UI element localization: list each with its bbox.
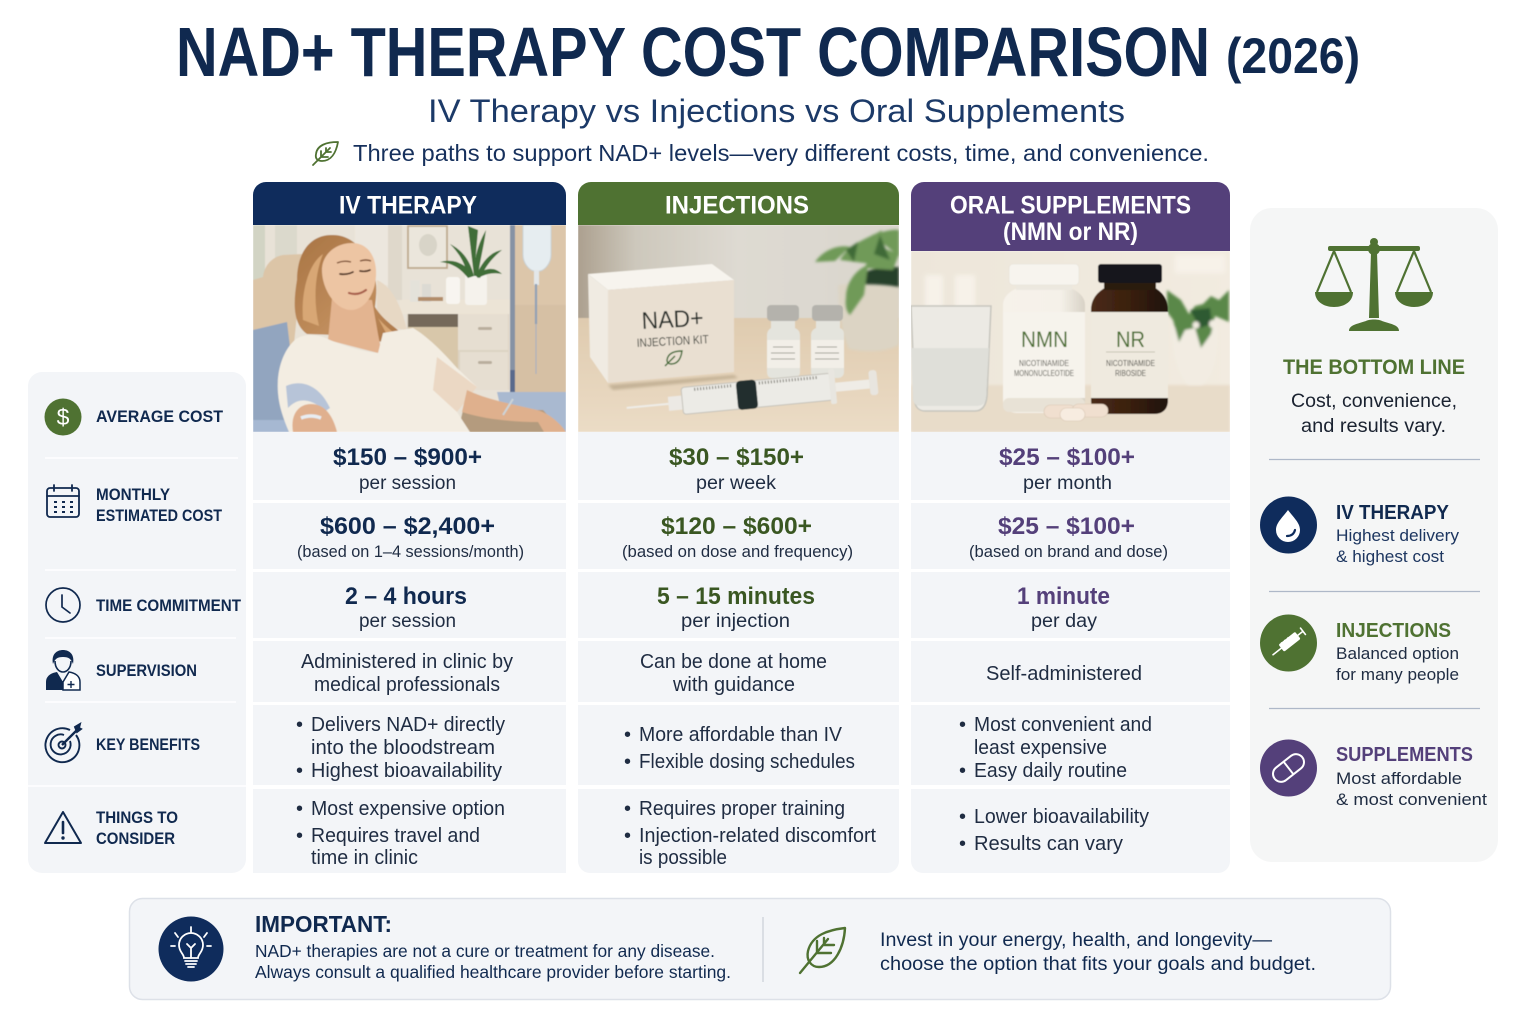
icon: calendar — [47, 485, 79, 517]
icon: syringe — [1260, 614, 1317, 672]
icon: dollar coin — [44, 398, 82, 436]
row: time: 1 minute — [1017, 583, 1110, 610]
header: oral supplements: ORAL SUPPLEMENTS — [950, 192, 1191, 220]
row: supervision: Self-administered — [986, 663, 1142, 685]
text: summary: Cost, convenience, — [1291, 391, 1457, 412]
label: things to consider: CONSIDER — [96, 830, 175, 848]
label: monthly estimated cost: ESTIMATED COST — [96, 507, 222, 525]
row: considerations: Lower bioavailability — [974, 806, 1149, 828]
row: average cost: $30 – $150+ — [669, 444, 804, 471]
label: monthly estimated cost: MONTHLY — [96, 486, 170, 504]
row: time — [1017, 583, 1110, 632]
row: monthly cost: $120 – $600+ — [661, 513, 812, 540]
glass — [911, 306, 991, 411]
summary: injections: Balanced option — [1336, 644, 1459, 663]
text: disclaimer: Always consult a qualified healthcare provider before starting. — [255, 962, 731, 982]
title: (2026) — [1226, 28, 1360, 84]
NR bottle: RIBOSIDE — [1115, 369, 1146, 378]
NR bottle: NICOTINAMIDE — [1106, 359, 1155, 368]
row: benefits: least expensive — [974, 737, 1107, 759]
intro line with leaf icon: Three paths to support NAD+ levels—very different costs, time, and convenience. — [353, 140, 1209, 166]
header: IV therapy — [253, 182, 566, 225]
face — [322, 243, 376, 310]
summary: IV therapy: Highest delivery — [1336, 526, 1459, 545]
row: monthly cost: (based on dose and frequency) — [622, 542, 853, 561]
row: considerations: • — [959, 806, 966, 828]
row: monthly cost — [622, 513, 853, 561]
row: considerations: Most expensive option — [311, 798, 505, 820]
text: disclaimer: NAD+ therapies are not a cure or treatment for any disease. — [255, 941, 715, 961]
row: considerations — [624, 798, 876, 869]
text: important heading: IMPORTANT: — [255, 911, 392, 937]
icon: dollar coin: $ — [57, 404, 70, 430]
row: benefits: • — [624, 751, 631, 773]
row: supervision: with guidance — [672, 674, 795, 696]
vials — [767, 305, 800, 378]
icon: capsule — [1260, 740, 1317, 796]
label: things to consider — [96, 809, 178, 848]
summary: IV therapy: IV THERAPY — [1336, 502, 1450, 524]
text: closing message: choose the option that fits your goals and budget. — [880, 954, 1316, 975]
icon: target — [45, 724, 81, 762]
row: supervision: Can be done at home — [640, 651, 827, 673]
text: closing message: Invest in your energy, health, and longevity— — [880, 930, 1272, 951]
chair — [253, 254, 302, 346]
row: benefits: Most convenient and — [974, 714, 1152, 736]
syringe — [626, 370, 878, 415]
row: considerations: is possible — [639, 847, 727, 869]
summary: injections: INJECTIONS — [1336, 620, 1451, 642]
icon: doctor — [46, 650, 80, 690]
icon: balance scales — [1315, 238, 1433, 331]
NR bottle: NR — [1116, 327, 1145, 352]
heading: the bottom line: THE BOTTOM LINE — [1283, 356, 1465, 379]
row: benefits: into the bloodstream — [311, 737, 495, 759]
summary: injections: for many people — [1336, 665, 1459, 684]
text: closing message — [880, 930, 1316, 975]
row: time — [657, 583, 815, 632]
icon: warning triangle — [45, 812, 81, 843]
icon: clock — [46, 588, 80, 622]
panel: row labels — [28, 372, 246, 873]
row: average cost: $25 – $100+ — [999, 444, 1135, 471]
panel: oral supplements column — [911, 182, 1230, 873]
summary: supplements — [1336, 744, 1487, 809]
NMN bottle: NICOTINAMIDE — [1019, 359, 1069, 368]
panel: IV therapy column — [253, 182, 566, 873]
row: time: per day — [1031, 611, 1098, 632]
title: NAD+ THERAPY COST COMPARISON — [176, 13, 1210, 91]
summary: IV therapy: & highest cost — [1336, 547, 1444, 566]
row: supervision: medical professionals — [314, 674, 500, 696]
row: monthly cost: $600 – $2,400+ — [320, 513, 495, 540]
NMN bottle — [1003, 264, 1085, 413]
header: IV therapy: IV THERAPY — [339, 192, 477, 220]
row: monthly cost: (based on 1–4 sessions/month) — [297, 542, 524, 561]
row: considerations: Requires proper training — [639, 798, 845, 820]
summary: IV therapy — [1336, 502, 1459, 566]
header: injections: INJECTIONS — [665, 192, 809, 220]
neck — [328, 298, 382, 354]
row: benefits: • — [296, 760, 303, 782]
row: supervision — [301, 651, 513, 696]
row: monthly cost: $25 – $100+ — [998, 513, 1135, 540]
text: summary — [1291, 391, 1457, 437]
row: benefits: • — [959, 760, 966, 782]
row: considerations: • — [624, 798, 631, 820]
header: injections — [578, 182, 899, 225]
NR bottle — [1091, 264, 1168, 414]
row: monthly cost — [969, 513, 1168, 561]
row: considerations: • — [296, 798, 303, 820]
label: things to consider: THINGS TO — [96, 809, 178, 827]
row: average cost: per session — [359, 473, 456, 494]
subtitle: IV Therapy vs Injections vs Oral Supplements — [428, 93, 1125, 129]
row: average cost — [999, 444, 1135, 494]
row: benefits: Easy daily routine — [974, 760, 1127, 782]
summary: supplements: & most convenient — [1336, 790, 1487, 809]
row: considerations: • — [624, 825, 631, 847]
text: summary: and results vary. — [1301, 416, 1446, 437]
row: benefits: • — [296, 714, 303, 736]
photo: NAD+ injection kit, vials and syringe: NAD+ — [641, 305, 704, 335]
row: benefits — [296, 714, 505, 782]
panel: the bottom line — [1250, 208, 1498, 862]
summary: injections — [1336, 620, 1459, 684]
panel: injections column — [578, 182, 899, 873]
row: considerations: Requires travel and — [311, 825, 480, 847]
icon: light bulb — [158, 916, 224, 982]
label: key benefits: KEY BENEFITS — [96, 736, 200, 754]
row: supervision: Administered in clinic by — [301, 651, 513, 673]
row: considerations — [296, 798, 505, 869]
row: considerations: Injection-related discomfort — [639, 825, 876, 847]
row: average cost — [669, 444, 804, 494]
row: benefits: Highest bioavailability — [311, 760, 502, 782]
row: benefits: • — [959, 714, 966, 736]
row: benefits: • — [624, 724, 631, 746]
row: benefits: Flexible dosing schedules — [639, 751, 855, 773]
summary: supplements: SUPPLEMENTS — [1336, 744, 1473, 766]
hair — [294, 234, 398, 342]
photo: NMN and NR supplement bottles — [911, 251, 1230, 432]
text: disclaimer — [255, 941, 731, 982]
row: benefits: Delivers NAD+ directly — [311, 714, 505, 736]
NMN bottle: NMN — [1021, 327, 1068, 352]
header: oral supplements: (NMN or NR) — [1003, 218, 1138, 246]
summary: supplements: Most affordable — [1336, 769, 1462, 788]
icon: leaf — [313, 142, 338, 165]
label: average cost: AVERAGE COST — [96, 408, 223, 426]
row: average cost: per month — [1023, 473, 1112, 494]
photo: woman relaxing during IV infusion — [253, 225, 566, 432]
row: time: per session — [359, 611, 456, 632]
row: time — [345, 583, 467, 632]
row: average cost: per week — [696, 473, 777, 494]
row: supervision — [640, 651, 827, 696]
row: average cost: $150 – $900+ — [333, 444, 482, 471]
row: considerations: • — [959, 833, 966, 855]
NMN bottle: MONONUCLEOTIDE — [1014, 369, 1074, 378]
row: average cost — [333, 444, 482, 494]
row: benefits: More affordable than IV — [639, 724, 843, 746]
icon: water drop — [1260, 496, 1317, 554]
label: time commitment: TIME COMMITMENT — [96, 597, 241, 615]
photo: NAD+ injection kit, vials and syringe: INJECTION KIT — [636, 332, 710, 350]
panel: important note — [130, 898, 1390, 1000]
label: monthly estimated cost — [96, 486, 222, 525]
row: time: 5 – 15 minutes — [657, 583, 815, 610]
row: considerations: Results can vary — [974, 833, 1123, 855]
icon: leaf — [800, 928, 845, 973]
header: oral supplements — [911, 182, 1230, 251]
label: supervision: SUPERVISION — [96, 662, 197, 680]
row: considerations: • — [296, 825, 303, 847]
row: benefits — [624, 724, 855, 773]
sweater — [278, 328, 477, 432]
row: time: per injection — [681, 611, 790, 632]
row: considerations — [959, 806, 1149, 855]
row: benefits — [959, 714, 1152, 782]
capsules — [1044, 404, 1108, 421]
row: monthly cost — [297, 513, 524, 561]
row: monthly cost: (based on brand and dose) — [969, 542, 1168, 561]
row: considerations: time in clinic — [311, 847, 418, 869]
photo: NAD+ injection kit, vials and syringe — [578, 225, 899, 432]
row: time: 2 – 4 hours — [345, 583, 467, 610]
